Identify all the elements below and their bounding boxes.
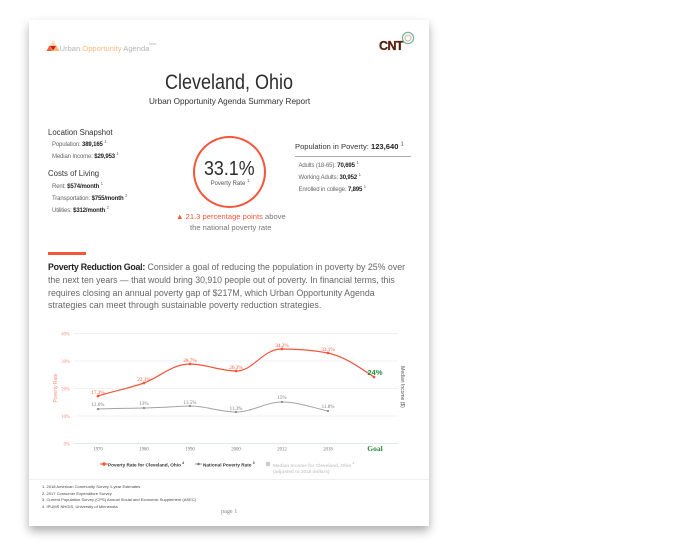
footnotes: 4. IPUMS NHGIS, University of Minnesota (42, 504, 118, 508)
callout: above national rate: the national poverty rate (190, 222, 271, 232)
logo: Urban Opportunity Agenda: Urban Opportunity Agenda (60, 44, 149, 53)
chart legend: National Poverty Rate 3 (203, 461, 255, 468)
panel: location snapshot and costs of living: Population: 389,165 1 (52, 139, 106, 148)
national poverty line: 15% (277, 396, 287, 401)
Cleveland poverty line: 22.1% (137, 377, 151, 383)
y axis labels: 0% (64, 442, 70, 448)
panel: location snapshot and costs of living: Median Income: $29,953 1 (52, 151, 119, 160)
x axis labels (93, 448, 333, 452)
chart legend: Median Income for Cleveland, Ohio 4 (273, 461, 354, 468)
footnotes: 3. Current Population Survey (CPS) Annual Social and Economic Supplement (ASEC) (42, 497, 196, 502)
Cleveland poverty line: 33.1% (321, 347, 335, 353)
panel: location snapshot and costs of living: Rent: $574/month 1 (52, 180, 103, 190)
panel: population in poverty: Population in Poverty: 123,640 1 (295, 141, 404, 151)
text block: poverty reduction goal: Poverty Reduction Goal: Consider a goal of reducing the population in poverty by 25% over (48, 262, 405, 272)
Cleveland poverty line: 17.3% (91, 390, 105, 396)
logo: CNT: CNT (379, 39, 403, 53)
logo: Urban Opportunity Agenda: beta (149, 42, 156, 46)
logo: CNT (379, 32, 414, 53)
y axis title: poverty rate: Poverty Rate (53, 373, 59, 402)
text block: poverty reduction goal: requires closing an annual poverty gap of $217M, which Urban Opportunity Agenda (48, 288, 375, 298)
x axis labels: 1970 (93, 448, 103, 452)
panel: population in poverty (295, 141, 411, 193)
x axis labels: 2000 (231, 448, 241, 452)
y axis labels: 30% (61, 360, 70, 365)
x axis labels: 2012 (277, 448, 287, 452)
panel: location snapshot and costs of living: Location Snapshot (48, 128, 113, 137)
text block: poverty reduction goal: the next ten years — that would bring 30,910 people out of poverty. In financial terms, this (48, 274, 395, 286)
panel: population in poverty: Working Adults: 30,952 1 (298, 172, 361, 181)
poverty rate label: Poverty Rate 1 (211, 178, 249, 186)
x axis labels: 1990 (185, 448, 195, 452)
national poverty line: 13.5% (184, 401, 196, 406)
national poverty line: 11.8% (322, 405, 334, 410)
y axis title: median income: Median Income ($) (399, 366, 405, 408)
x axis labels: 1980 (139, 448, 149, 452)
y axis labels: 20% (61, 388, 70, 392)
y axis labels: 10% (61, 415, 70, 420)
Cleveland poverty line: 26.3% (229, 365, 243, 371)
report page (29, 20, 429, 526)
subtitle: Urban Opportunity Agenda Summary Report (149, 97, 310, 106)
Cleveland poverty line: 28.7% (183, 358, 197, 364)
panel: location snapshot and costs of living (48, 128, 128, 214)
Cleveland poverty line: 34.2% (275, 343, 289, 349)
panel: location snapshot and costs of living: Costs of Living (48, 169, 99, 178)
panel: location snapshot and costs of living: Utilities: $312/month 2 (52, 204, 109, 214)
y axis labels: 40% (61, 332, 70, 338)
panel: population in poverty: Adults (18-65): 70,695 1 (298, 160, 359, 169)
logo: Urban Opportunity Agenda (46, 40, 156, 53)
national poverty line: 12.6% (92, 403, 104, 408)
big poverty rate number: 33.1% (204, 157, 254, 180)
x axis labels: 2018 (323, 448, 333, 452)
text block: poverty reduction goal: strategies can meet through sustainable poverty reduction strategies. (48, 300, 321, 311)
national poverty line: 11.3% (230, 407, 242, 412)
page number: page 1 (221, 508, 237, 515)
callout: above national rate (176, 212, 286, 232)
footnotes (42, 484, 196, 509)
chart legend: (adjusted to 2018 dollars) (273, 468, 330, 474)
footnotes: 1. 2018 American Community Survey 1-year Estimates (42, 484, 140, 489)
text block: poverty reduction goal (48, 262, 405, 311)
goal value: 24% (367, 368, 383, 377)
chart legend: Poverty Rate for Cleveland, Ohio 4 (108, 461, 184, 468)
goal label: Goal (367, 444, 383, 453)
y axis labels (61, 332, 70, 448)
national poverty line (92, 396, 334, 413)
chart legend (100, 461, 354, 474)
Cleveland poverty line (91, 343, 383, 397)
line chart: poverty rate over time (53, 332, 405, 453)
panel: population in poverty: Enrolled in college: 7,895 1 (298, 184, 366, 193)
national poverty line: 13% (139, 402, 149, 407)
panel: poverty rate circle (193, 136, 266, 208)
title: Cleveland, Ohio (165, 71, 293, 94)
callout: above national rate: ▲ 21.3 percentage points above (176, 212, 286, 221)
footnotes: 2. 2017 Consumer Expenditure Survey (42, 490, 112, 496)
panel: location snapshot and costs of living: Transportation: $755/month 2 (52, 193, 127, 202)
